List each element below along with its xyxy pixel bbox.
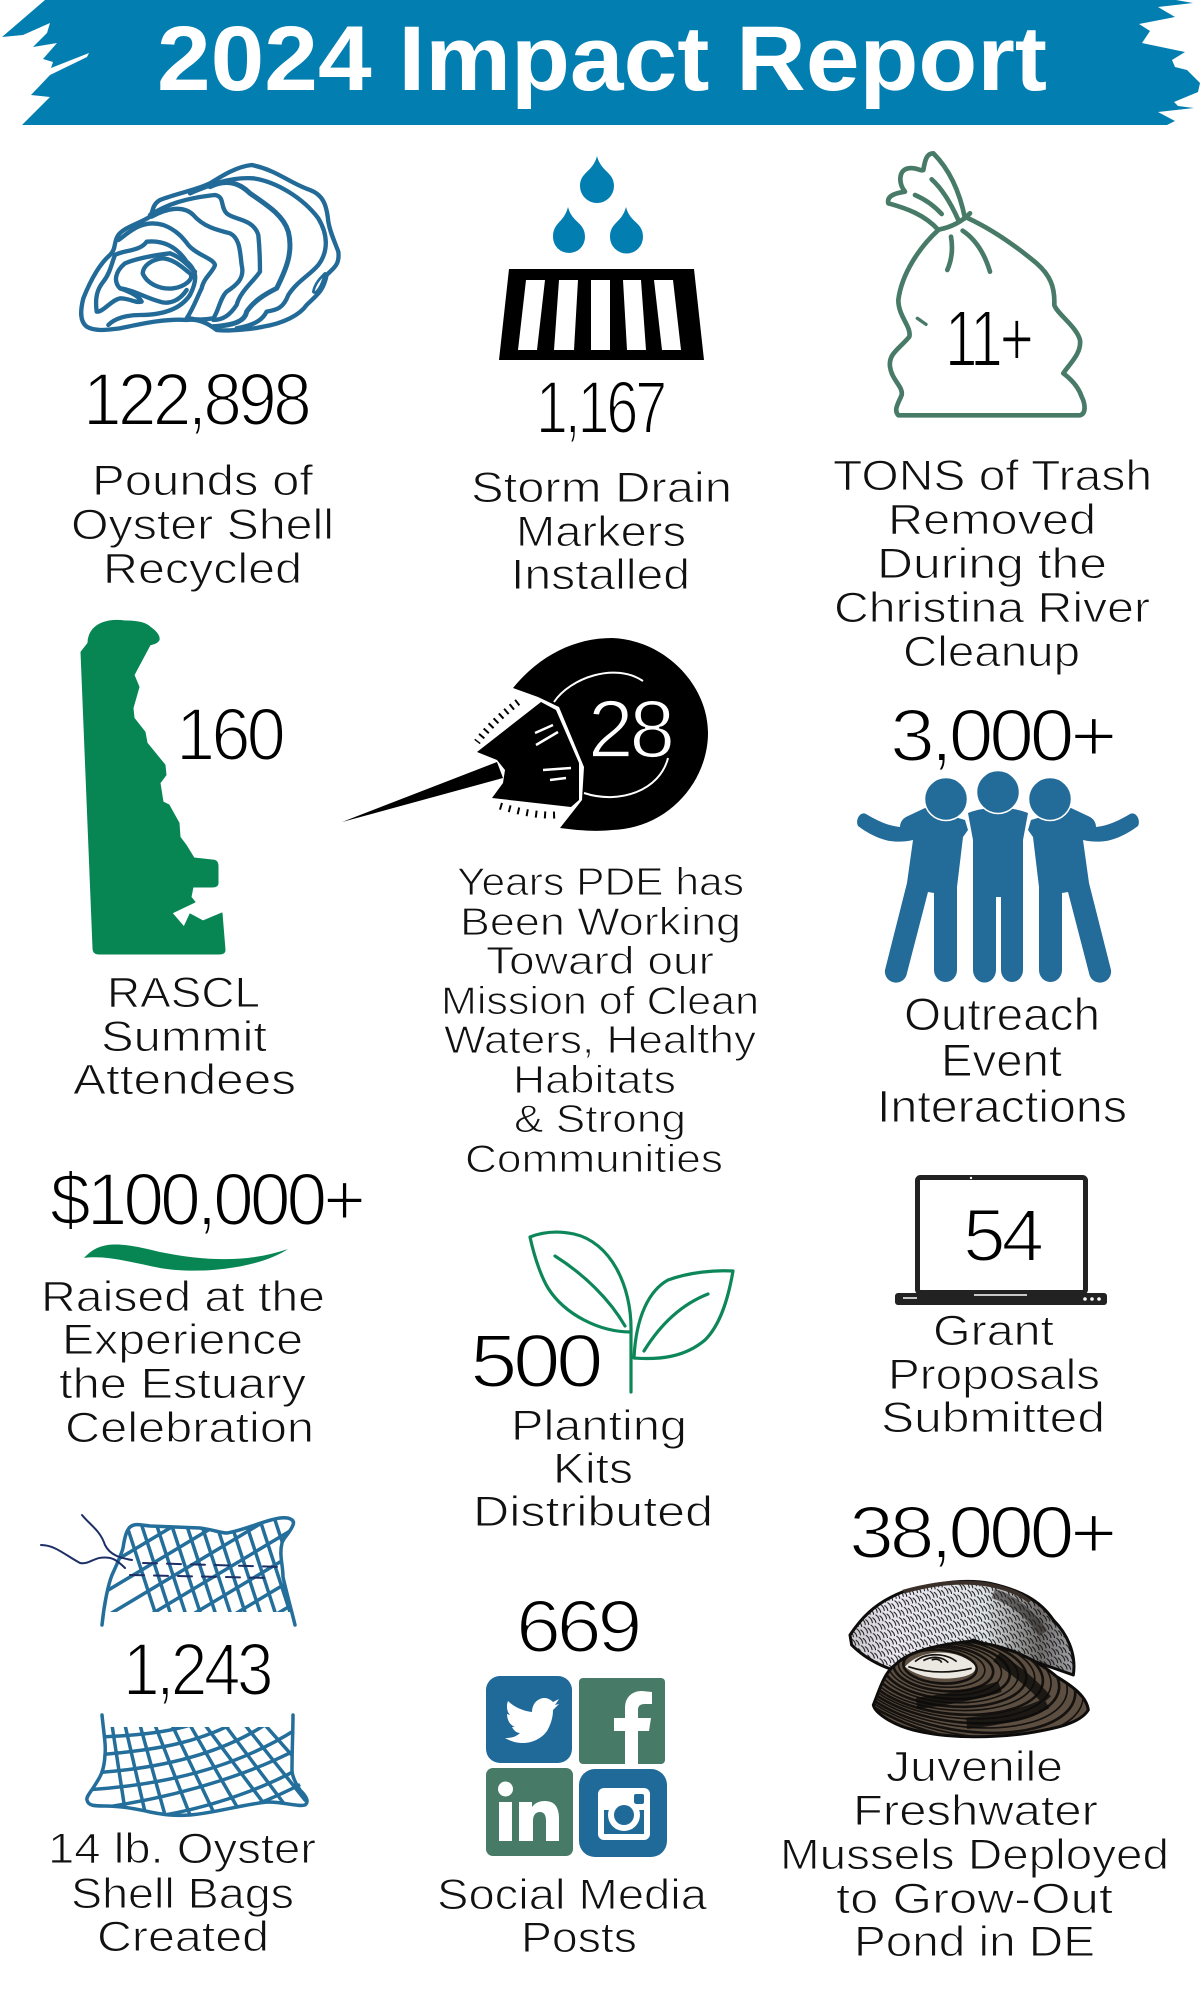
panel: social media posts	[437, 1585, 707, 1962]
label: & Strong	[514, 1098, 686, 1141]
number: 160	[176, 693, 284, 776]
label: Pond in DE	[854, 1918, 1095, 1966]
label: Interactions	[877, 1081, 1127, 1132]
title banner	[2, 0, 1200, 125]
panel: trash removed	[833, 153, 1152, 676]
label: Proposals	[888, 1351, 1100, 1399]
label	[437, 1871, 707, 1962]
label: Celebration	[65, 1404, 314, 1452]
label: Created	[97, 1913, 269, 1961]
label: Markers	[516, 508, 686, 556]
label: Habitats	[513, 1059, 676, 1102]
icon: three people hugging	[857, 770, 1139, 983]
label: Pounds of	[92, 457, 314, 505]
icon: lower net bag	[85, 1715, 307, 1815]
panel: storm drain markers	[471, 156, 732, 599]
label	[471, 464, 732, 599]
label: Outreach	[904, 989, 1100, 1040]
number: 28	[588, 684, 672, 775]
number: 54	[963, 1194, 1042, 1277]
icon: twitter	[486, 1676, 572, 1763]
label	[881, 1307, 1105, 1442]
label: Mission of Clean	[441, 980, 759, 1023]
banner brush shape	[2, 0, 1200, 125]
number: 1,243	[123, 1628, 271, 1711]
label	[473, 1402, 713, 1536]
number: $100,000+	[50, 1158, 363, 1241]
label: Attendees	[73, 1056, 296, 1104]
title: 2024 Impact Report	[157, 8, 1047, 110]
label: Freshwater	[853, 1787, 1098, 1835]
label: Grant	[933, 1307, 1054, 1355]
number: 1,167	[536, 366, 665, 449]
label: Social Media	[437, 1871, 707, 1919]
number: 38,000+	[849, 1491, 1114, 1574]
label: Christina River	[834, 584, 1150, 632]
label: the Estuary	[59, 1360, 307, 1408]
label: Recycled	[103, 545, 302, 593]
label: Shell Bags	[71, 1870, 294, 1918]
label: Years PDE has	[457, 861, 744, 904]
label	[73, 969, 296, 1104]
label	[441, 861, 759, 1181]
label	[71, 457, 334, 593]
panel: raised at celebration	[41, 1158, 363, 1452]
label	[877, 989, 1127, 1132]
label: Installed	[511, 551, 690, 599]
icon: upper net bag	[40, 1514, 297, 1627]
number: 500	[470, 1319, 600, 1403]
label: During the	[877, 540, 1107, 588]
panel: oyster shell bags	[40, 1514, 315, 1951]
label: Submitted	[881, 1394, 1105, 1442]
icon: horseshoe crab	[342, 638, 708, 831]
number: 11+	[945, 294, 1031, 383]
label: RASCL	[107, 969, 260, 1017]
label: Planting	[511, 1402, 687, 1450]
panel: outreach interactions	[857, 694, 1139, 1132]
label: Raised at the	[41, 1273, 325, 1321]
label: Summit	[101, 1013, 267, 1061]
label: TONS of Trash	[833, 452, 1152, 500]
icon: linkedin	[486, 1768, 573, 1856]
label	[48, 1825, 316, 1961]
icon: mussels	[848, 1580, 1090, 1738]
label: Distributed	[473, 1488, 713, 1536]
panel: RASCL summit attendees	[73, 620, 296, 1104]
label: Storm Drain	[471, 464, 732, 512]
label	[833, 452, 1152, 676]
label: Kits	[553, 1445, 633, 1493]
label: Waters, Healthy	[444, 1019, 757, 1062]
label: Juvenile	[886, 1743, 1063, 1791]
icon: facebook	[579, 1678, 665, 1764]
label: Mussels Deployed	[780, 1831, 1169, 1879]
number: 669	[516, 1585, 639, 1668]
label: to Grow-Out	[836, 1875, 1113, 1923]
panel: juvenile freshwater mussels	[780, 1491, 1169, 1966]
panel: planting kits	[470, 1232, 733, 1536]
icon: oyster shell	[81, 165, 339, 330]
label: Event	[941, 1035, 1063, 1086]
panel: grant proposals	[881, 1177, 1107, 1442]
label: Communities	[465, 1138, 723, 1181]
number: 122,898	[83, 358, 309, 441]
icon: trash bag	[888, 153, 1085, 415]
icon: sprout	[530, 1232, 733, 1392]
label: Cleanup	[903, 628, 1080, 676]
number: 3,000+	[890, 694, 1114, 777]
label: Posts	[521, 1914, 637, 1962]
label: Oyster Shell	[71, 501, 334, 549]
icon: water drops over storm drain	[499, 156, 704, 360]
label	[780, 1743, 1169, 1966]
icon: map of Delaware	[81, 620, 225, 954]
label: Been Working	[460, 901, 741, 944]
label: Toward our	[486, 940, 714, 983]
label: 14 lb. Oyster	[48, 1825, 316, 1873]
icon: laptop	[895, 1177, 1107, 1305]
label	[41, 1273, 325, 1452]
label: Removed	[888, 496, 1096, 544]
panel: years working	[342, 638, 759, 1181]
label: Experience	[62, 1316, 303, 1364]
icon: green swoosh	[84, 1244, 288, 1271]
panel: oyster shell recycled	[71, 165, 339, 593]
icon: instagram	[579, 1769, 667, 1857]
